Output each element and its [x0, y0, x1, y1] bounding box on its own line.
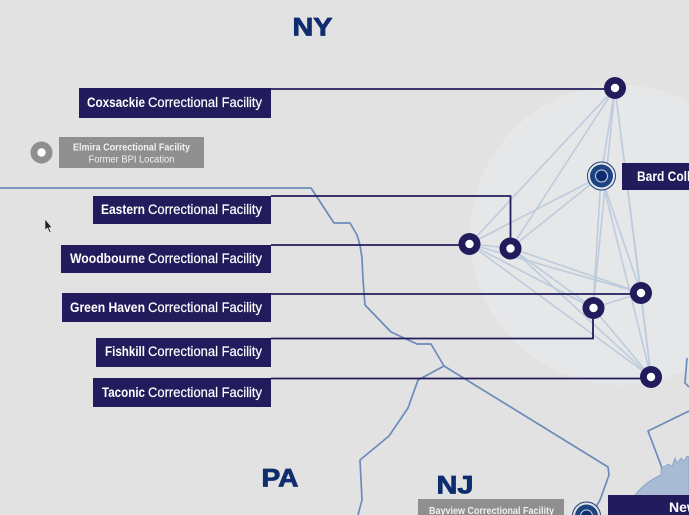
- icon: mouse cursor: [45, 219, 52, 232]
- label: Elmira former location: Former BPI Location: [88, 154, 174, 166]
- label: Eastern: Correctional Facility: [148, 201, 262, 217]
- label: Fishkill: [96, 338, 271, 367]
- label: Green Haven: Correctional Facility: [148, 299, 262, 315]
- connector lines: [271, 89, 651, 378]
- label: Green Haven: Green Haven: [70, 299, 145, 315]
- label: Taconic: Correctional Facility: [148, 384, 262, 400]
- label: Eastern: [93, 196, 271, 224]
- water: Long Island Sound: [635, 456, 689, 515]
- label: Woodbourne: [61, 245, 271, 273]
- node: Bayview: [572, 502, 600, 515]
- highlighted region circle: [470, 85, 689, 385]
- node: Green Haven: [630, 282, 652, 304]
- node: Bard College: [588, 162, 616, 190]
- node: Elmira, former location: [30, 142, 52, 164]
- state border lines: [0, 188, 689, 515]
- label: Bayview: [418, 499, 564, 515]
- label: Taconic: Taconic: [102, 384, 145, 400]
- label: Green Haven: [62, 293, 271, 322]
- label: Taconic: [93, 378, 271, 407]
- label: Woodbourne: Woodbourne: [70, 250, 145, 266]
- label: Fishkill: Fishkill: [105, 343, 145, 359]
- node: Woodbourne: [458, 233, 480, 255]
- network links between sites: [470, 88, 651, 377]
- node: Coxsackie: [604, 77, 626, 99]
- label: Coxsackie: Correctional Facility: [148, 94, 262, 110]
- label: Coxsackie: [79, 88, 271, 118]
- node: Eastern: [500, 238, 522, 260]
- label: Eastern: Eastern: [101, 201, 145, 217]
- label: New York: [608, 495, 689, 515]
- state label: NY: NY: [292, 14, 333, 42]
- node: Fishkill: [582, 297, 604, 319]
- label: Woodbourne: Correctional Facility: [148, 250, 262, 266]
- state label: PA: PA: [262, 465, 298, 493]
- label: Elmira former location: Elmira Correctional Facility: [73, 142, 190, 154]
- node: Taconic: [640, 366, 662, 388]
- label: Elmira former location: [59, 137, 204, 168]
- label: Bard College: [622, 163, 689, 190]
- label: Fishkill: Correctional Facility: [148, 343, 262, 359]
- label: Coxsackie: Coxsackie: [87, 94, 145, 110]
- state label: NJ: NJ: [436, 472, 474, 500]
